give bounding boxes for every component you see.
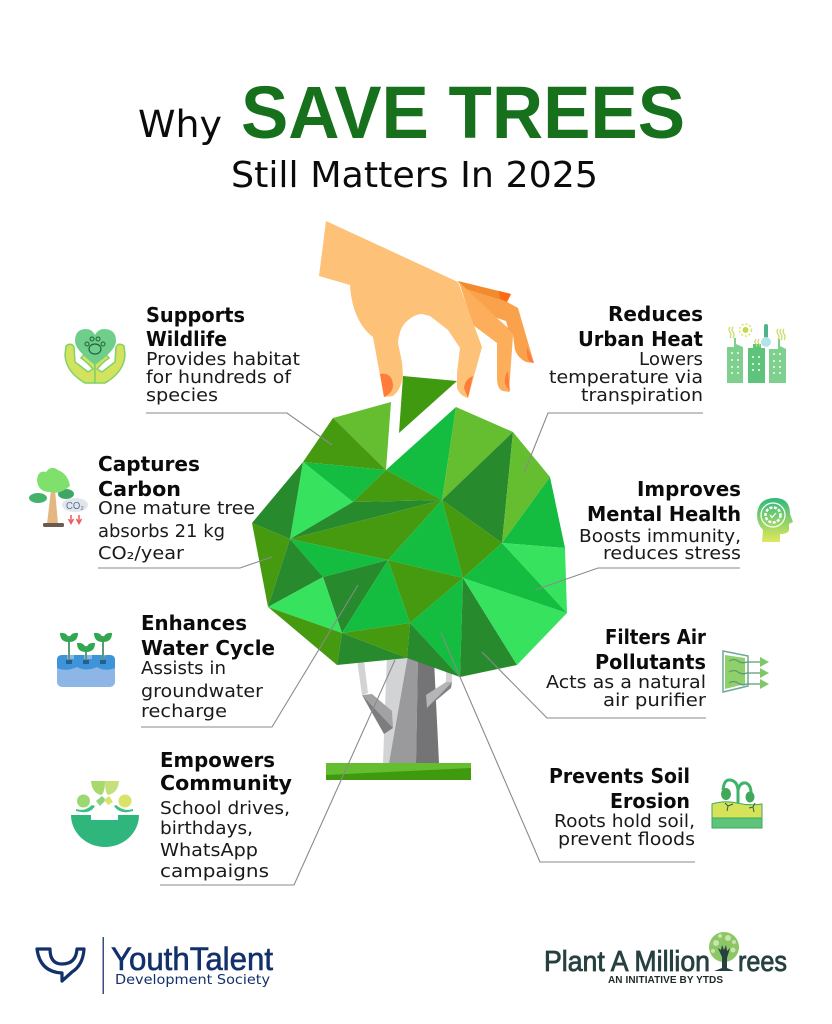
icon: community with sprout: [71, 781, 139, 847]
leader line: [524, 413, 703, 473]
leader line: [535, 568, 740, 590]
heading: Urban Heat: [578, 327, 703, 351]
leader line: [160, 660, 395, 885]
heading: Enhances: [141, 611, 247, 635]
text block: reduces stress: [603, 544, 741, 564]
leader line: [141, 585, 358, 727]
panel: captures carbon: [29, 452, 272, 568]
icon: heart in hands: [65, 329, 125, 383]
heading: Mental Health: [587, 502, 741, 526]
text block: air purifier: [603, 691, 707, 711]
icon: speech bubble mark: [37, 949, 84, 981]
illustration: low-poly tree: [252, 376, 567, 780]
panel: improves mental health: [535, 477, 793, 590]
heading: [587, 477, 741, 526]
heading: [549, 764, 690, 813]
text block: [141, 659, 264, 722]
heading: [98, 452, 200, 501]
heading: Community: [160, 771, 292, 795]
panel: empowers community: [71, 660, 395, 885]
heading: Reduces: [608, 302, 703, 326]
text block: Lowers: [639, 350, 703, 370]
icon: tree with CO2: CO₂: [66, 501, 84, 512]
icon: tree with CO2: [29, 468, 88, 527]
heading: Empowers: [160, 748, 275, 772]
text block: campaigns: [160, 862, 269, 882]
icon: hand picking the piece: [319, 221, 534, 398]
heading: [141, 611, 275, 660]
text block: temperature via: [549, 368, 703, 388]
text block: [579, 527, 741, 564]
text block: WhatsApp: [160, 841, 258, 861]
leader line: [146, 413, 332, 445]
tree crown: [252, 402, 567, 677]
leader line: [482, 652, 706, 718]
text block: transpiration: [581, 386, 703, 406]
text block: One mature tree: [98, 499, 255, 519]
text block: Assists in: [141, 659, 226, 679]
text block: absorbs 21 kg: [98, 522, 225, 542]
logo: Youth Talent Development Society: YouthTalent: [111, 941, 273, 977]
heading: Filters Air: [605, 625, 707, 649]
text block: Boosts immunity,: [579, 527, 741, 547]
heading: Improves: [637, 477, 741, 501]
title: SAVE TREES: [241, 71, 685, 154]
logo: Plant A Million Trees: rees: [738, 946, 787, 978]
heading: Carbon: [98, 477, 181, 501]
text block: [554, 812, 695, 850]
text block: recharge: [141, 702, 227, 722]
heading: [578, 302, 703, 351]
floating triangle piece: [399, 376, 457, 433]
text block: CO₂/year: [98, 544, 185, 564]
text block: School drives,: [160, 799, 290, 819]
text block: prevent floods: [558, 830, 695, 850]
text block: [160, 799, 290, 882]
icon: air filter: [723, 651, 769, 692]
heading: [595, 625, 707, 674]
logo: Youth Talent Development Society: Development Society: [115, 973, 270, 988]
icon: city heat: [727, 324, 786, 383]
heading: Prevents Soil: [549, 764, 690, 788]
leader line: [441, 633, 695, 862]
text block: groundwater: [141, 682, 264, 702]
icon: head with gear: [757, 498, 793, 542]
panel: filters air pollutants: [482, 625, 769, 718]
logo: Plant A Million Trees: AN INITIATIVE BY YTDS: [608, 975, 723, 986]
icon: tree as letter T: [709, 932, 739, 971]
logo: Youth Talent Development Society: [37, 937, 273, 994]
logo: Plant A Million Trees: [544, 932, 787, 986]
text block: species: [146, 386, 218, 406]
text block: [146, 350, 300, 406]
text block: Roots hold soil,: [554, 812, 695, 832]
text block: [98, 499, 255, 564]
ground strip: [326, 763, 471, 780]
heading: Supports: [146, 303, 245, 327]
leader line: [98, 557, 272, 568]
heading: Captures: [98, 452, 200, 476]
logo: Plant A Million Trees: Plant A Million: [544, 946, 710, 978]
text block: Acts as a natural: [546, 673, 706, 693]
heading: Wildlife: [146, 327, 227, 351]
panel: enhances water cycle: [57, 585, 358, 727]
text block: [549, 350, 703, 406]
heading: [146, 303, 245, 351]
heading: Water Cycle: [141, 636, 275, 660]
tree trunk: [357, 655, 452, 763]
icon: wilted plant on soil: [712, 780, 762, 828]
text block: birthdays,: [160, 819, 253, 839]
heading: Erosion: [610, 789, 690, 813]
heading: [160, 748, 292, 795]
heading: Pollutants: [595, 650, 706, 674]
title: Still Matters In 2025: [231, 155, 598, 196]
text block: for hundreds of: [146, 368, 292, 388]
text block: Provides habitat: [146, 350, 300, 370]
panel: prevents soil erosion: [441, 633, 762, 862]
panel: reduces urban heat: [524, 302, 786, 473]
text block: [546, 673, 707, 711]
panel: supports wildlife: [65, 303, 332, 445]
title: Why: [138, 103, 222, 146]
title: [138, 71, 685, 196]
icon: seedlings in water: [57, 633, 115, 687]
